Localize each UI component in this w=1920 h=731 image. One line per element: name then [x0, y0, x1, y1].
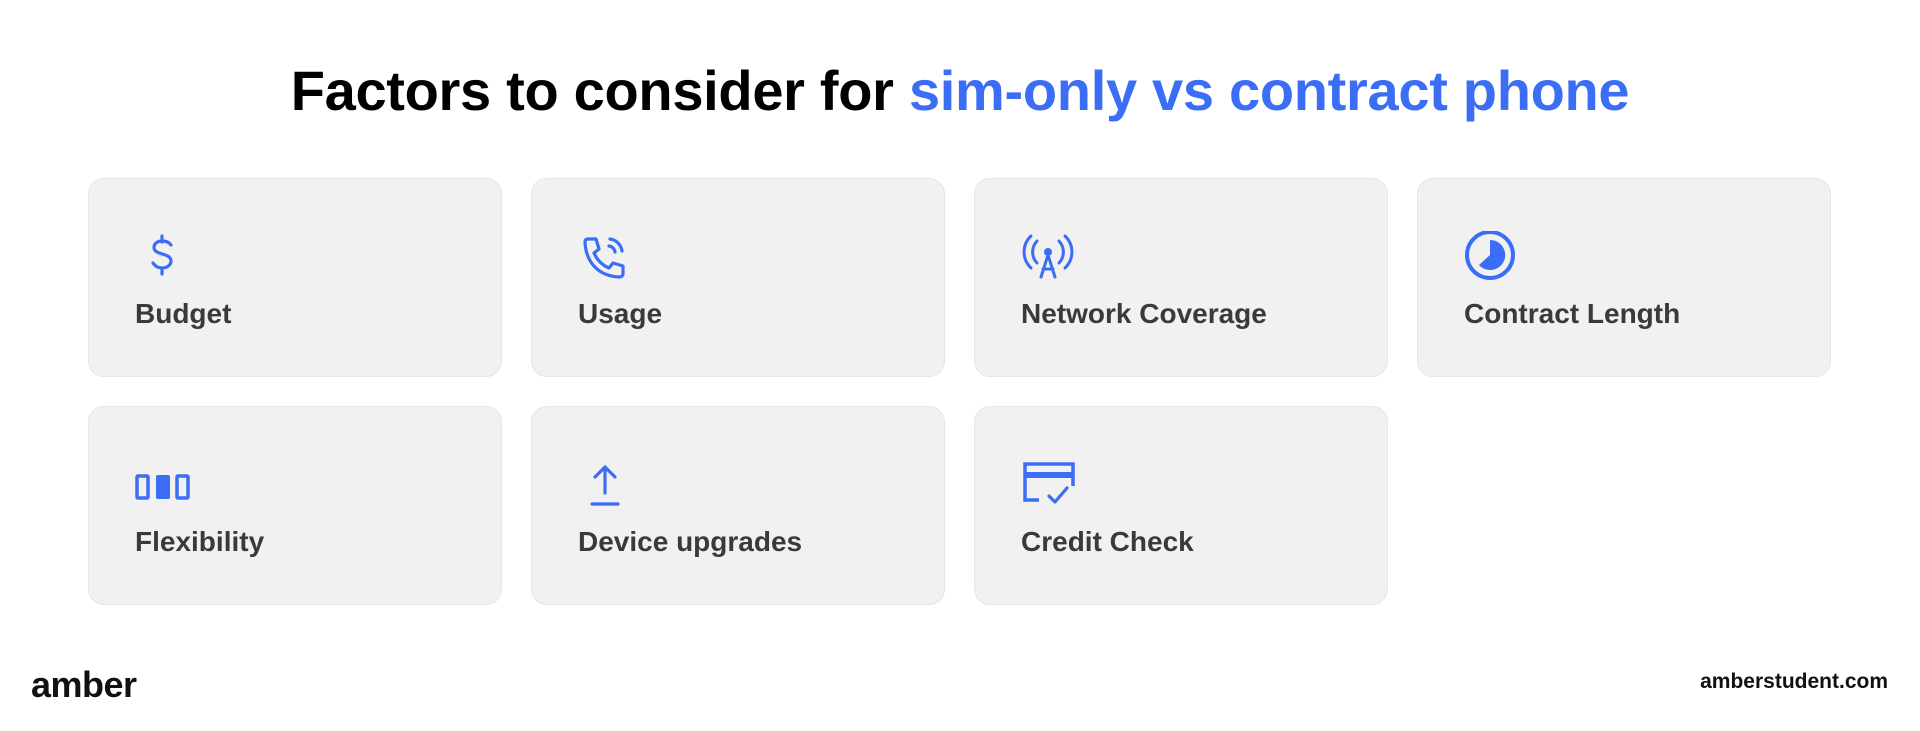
panel: budget [88, 178, 502, 377]
label: Credit Check [1021, 526, 1194, 557]
panel: device upgrades [531, 406, 945, 605]
panel: network coverage [974, 178, 1388, 377]
panel: flexibility [88, 406, 502, 605]
icon: card check [1023, 462, 1075, 504]
panel: credit check [974, 406, 1388, 605]
title: Factors to consider for sim-only vs contract phone [291, 59, 1629, 122]
label: Budget [135, 298, 231, 329]
icon: clock [1465, 231, 1515, 280]
url: amberstudent.com [1700, 670, 1888, 693]
label: Contract Length [1464, 298, 1680, 329]
icon: blocks [135, 474, 190, 500]
panel: usage [531, 178, 945, 377]
icon: phone [583, 237, 625, 279]
label: Usage [578, 298, 662, 329]
panel: contract length [1417, 178, 1831, 377]
logo: amber [31, 664, 137, 705]
icon: dollar [151, 234, 173, 276]
label: Flexibility [135, 526, 264, 557]
label: Device upgrades [578, 526, 802, 557]
icon: antenna [1022, 234, 1074, 278]
icon: upload arrow [590, 465, 620, 506]
label: Network Coverage [1021, 298, 1267, 329]
